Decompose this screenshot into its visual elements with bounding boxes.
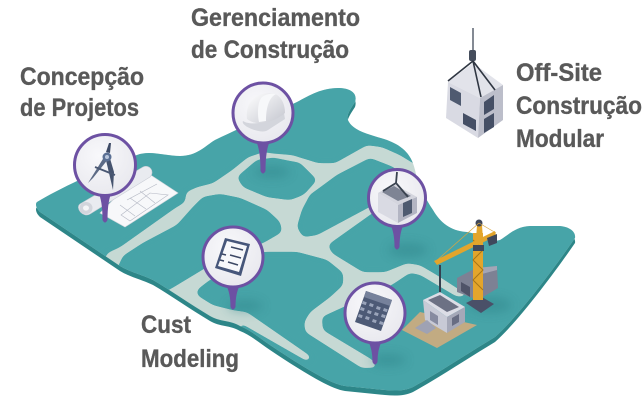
icon: checklist (215, 238, 250, 276)
label: Cust Modeling (141, 311, 239, 373)
pin ground shadows (227, 166, 512, 366)
label: Gerenciamento de Construção: Gerenciamento (191, 4, 360, 32)
label: Gerenciamento de Construção (191, 4, 360, 64)
label: Concepção de Projetos (20, 63, 144, 122)
crane base (466, 296, 494, 313)
construction site (402, 220, 498, 348)
pin: modular unit (368, 170, 426, 250)
label: Cust Modeling: Cust (141, 311, 192, 339)
pin: checklist (203, 227, 263, 310)
teal islands between roads (36, 88, 576, 390)
module illustration (446, 28, 503, 138)
foreground building (423, 292, 465, 317)
steps (415, 320, 436, 334)
label: Concepção de Projetos: Concepção (20, 63, 144, 91)
icon: hard hat (243, 93, 285, 131)
icon: hanging module (378, 172, 417, 223)
label: Cust Modeling: Modeling (141, 345, 239, 373)
label: Off-Site Construção Modular: Off-Site (516, 59, 602, 87)
land platform (36, 88, 576, 396)
crane jib (434, 231, 496, 265)
hook line (439, 265, 441, 296)
icon: drafting compass (88, 143, 115, 190)
crane top (476, 225, 483, 240)
label: Off-Site Construção Modular (516, 59, 642, 153)
crane mast (473, 233, 483, 300)
blueprint (78, 166, 178, 227)
pin: compass (74, 134, 136, 222)
label: Concepção de Projetos: de Projetos (20, 94, 139, 122)
background module (457, 266, 498, 300)
pin: hard hat (233, 83, 293, 174)
label: Gerenciamento de Construção: de Construção (191, 36, 349, 64)
pin: calculator (345, 283, 405, 364)
icon: calculator (355, 291, 392, 331)
label: Off-Site Construção Modular: Modular (516, 125, 604, 153)
